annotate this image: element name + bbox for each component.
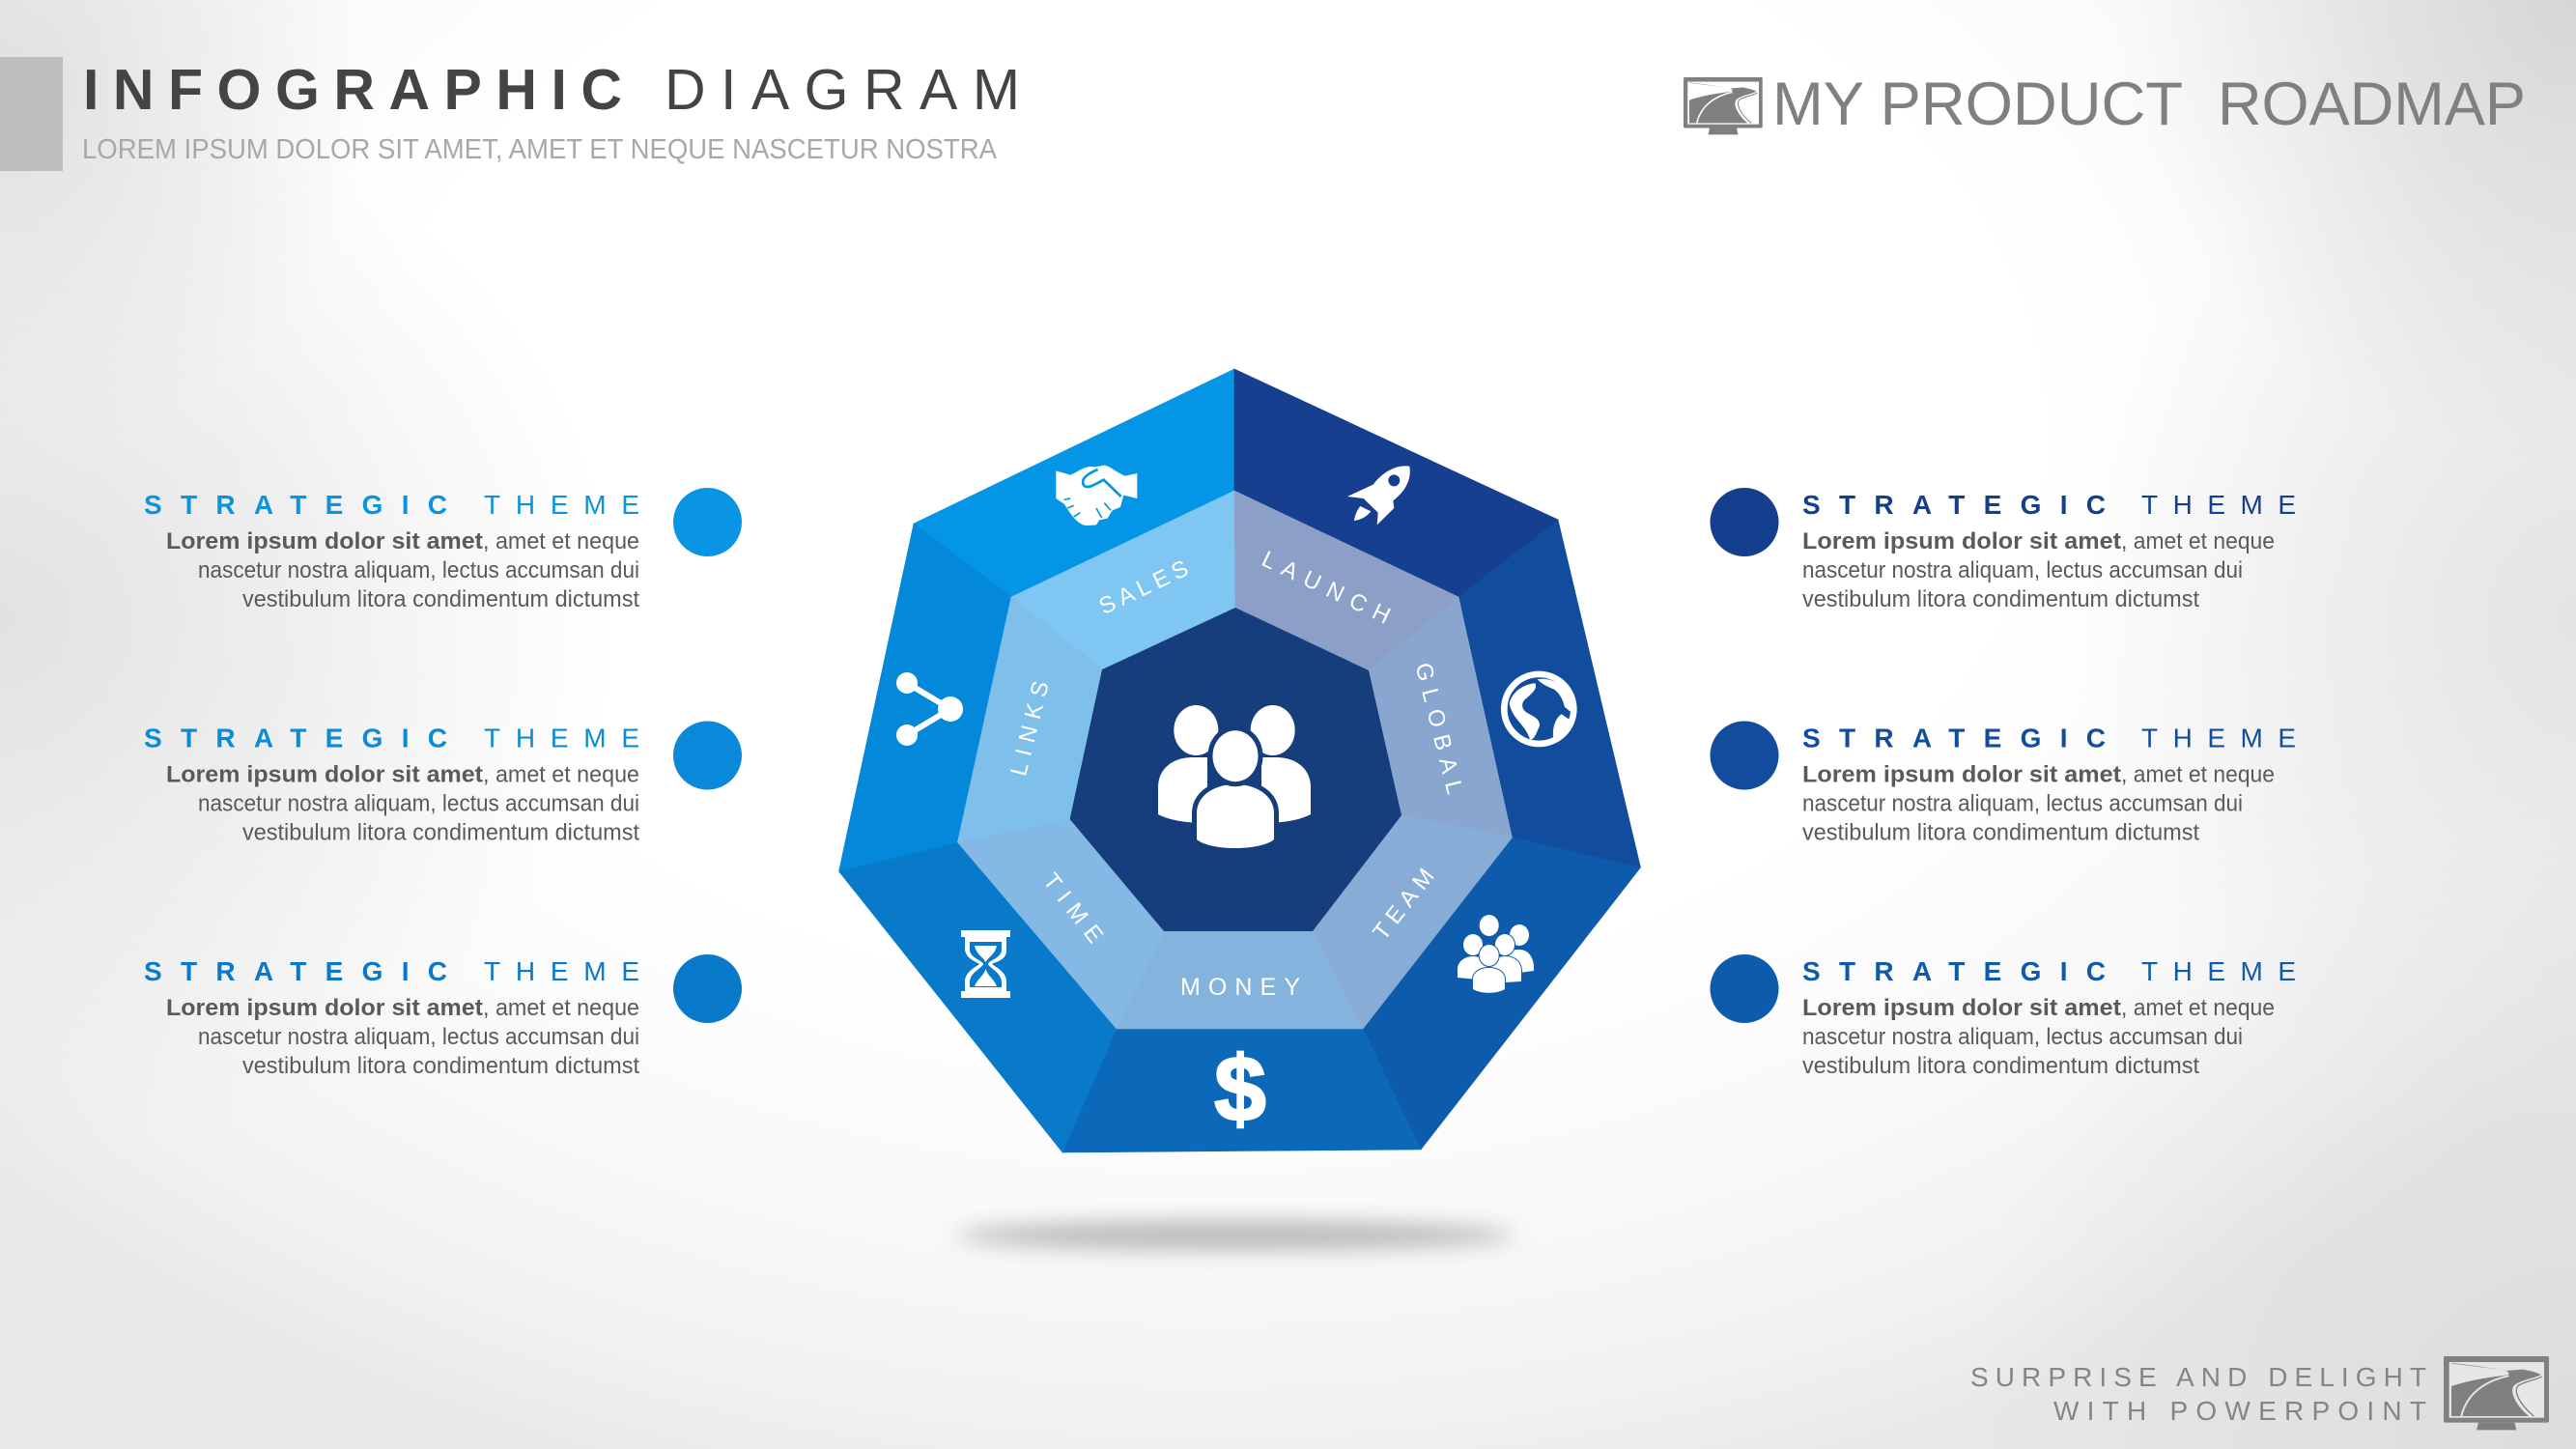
heptagon diagram bbox=[838, 369, 1640, 1152]
heading bbox=[144, 490, 639, 520]
body text: vestibulum litora condimentum dictumst bbox=[242, 819, 639, 846]
label: links: LINKS bbox=[1005, 678, 1055, 779]
heading: THEME bbox=[484, 723, 639, 753]
right theme 1 bbox=[1710, 488, 2296, 612]
label: launch: LAUNCH bbox=[1258, 546, 1395, 630]
heading: THEME bbox=[2141, 490, 2296, 520]
right theme 2 bbox=[1710, 721, 2296, 846]
heading bbox=[144, 723, 639, 753]
body text: nascetur nostra aliquam, lectus accumsan dui bbox=[198, 557, 639, 583]
body text bbox=[166, 995, 639, 1079]
left theme 2 bbox=[144, 721, 742, 846]
marker dot bbox=[1710, 954, 1779, 1023]
segment: money bbox=[1062, 931, 1421, 1152]
heading bbox=[1802, 723, 2296, 753]
header accent block bbox=[0, 57, 63, 171]
center hexagon bbox=[1070, 608, 1401, 931]
body text: vestibulum litora condimentum dictumst bbox=[1802, 586, 2199, 612]
logo: road monitor top bbox=[1684, 77, 1763, 134]
segment: global bbox=[1369, 520, 1640, 867]
body text: nascetur nostra aliquam, lectus accumsan dui bbox=[198, 790, 639, 817]
body text: , amet et neque bbox=[483, 995, 639, 1021]
icon: hourglass bbox=[961, 930, 1010, 998]
body text bbox=[1802, 761, 2275, 846]
heading: THEME bbox=[2141, 723, 2296, 753]
heading: THEME bbox=[484, 490, 639, 520]
body text: vestibulum litora condimentum dictumst bbox=[1802, 819, 2199, 846]
icon: rocket bbox=[1347, 466, 1410, 525]
segment: sales bbox=[914, 369, 1235, 669]
body text bbox=[1802, 528, 2275, 612]
body text: vestibulum litora condimentum dictumst bbox=[242, 586, 639, 612]
drop shadow under heptagon bbox=[957, 1220, 1514, 1251]
logo: road monitor bottom bbox=[2444, 1356, 2549, 1430]
body text: Lorem ipsum dolor sit amet bbox=[1802, 528, 2121, 554]
footer tagline bbox=[1970, 1362, 2426, 1426]
marker dot bbox=[673, 721, 742, 790]
icon: globe bbox=[1504, 674, 1573, 744]
body text: , amet et neque bbox=[2121, 995, 2275, 1021]
segment: team bbox=[1313, 815, 1640, 1150]
body text: vestibulum litora condimentum dictumst bbox=[242, 1053, 639, 1079]
heading: STRATEGIC bbox=[144, 956, 447, 986]
brand heading: MY PRODUCT bbox=[1772, 71, 2183, 138]
body text: , amet et neque bbox=[483, 528, 639, 554]
body text: , amet et neque bbox=[2121, 761, 2275, 788]
segment: launch bbox=[1234, 369, 1558, 670]
heading: STRATEGIC bbox=[1802, 723, 2106, 753]
body text bbox=[166, 528, 639, 612]
left theme 1 bbox=[144, 488, 742, 612]
body text: nascetur nostra aliquam, lectus accumsan dui bbox=[1802, 1024, 2243, 1050]
brand heading: ROADMAP bbox=[2218, 71, 2526, 138]
heading bbox=[1802, 490, 2296, 520]
heading: STRATEGIC bbox=[1802, 490, 2106, 520]
heading: STRATEGIC bbox=[144, 490, 447, 520]
label: time: TIME bbox=[1037, 868, 1108, 949]
body text: nascetur nostra aliquam, lectus accumsan dui bbox=[1802, 790, 2243, 817]
footer tagline: WITH POWERPOINT bbox=[2053, 1396, 2426, 1426]
marker dot bbox=[1710, 721, 1779, 790]
brand heading bbox=[1772, 71, 2526, 138]
marker dot bbox=[1710, 488, 1779, 556]
heading: THEME bbox=[2141, 956, 2296, 986]
label: sales: SALES bbox=[1095, 555, 1193, 620]
label: team: TEAM bbox=[1368, 864, 1440, 946]
segment: links bbox=[838, 524, 1102, 871]
segment: time bbox=[838, 819, 1164, 1152]
heading: STRATEGIC bbox=[1802, 956, 2106, 986]
body text bbox=[166, 761, 639, 846]
title: INFOGRAPHIC bbox=[83, 58, 622, 122]
body text: nascetur nostra aliquam, lectus accumsan dui bbox=[198, 1024, 639, 1050]
body text: nascetur nostra aliquam, lectus accumsan dui bbox=[1802, 557, 2243, 583]
footer tagline: SURPRISE AND DELIGHT bbox=[1970, 1362, 2426, 1392]
marker dot bbox=[673, 954, 742, 1023]
heading bbox=[1802, 956, 2296, 986]
body text: , amet et neque bbox=[2121, 528, 2275, 554]
body text: Lorem ipsum dolor sit amet bbox=[1802, 761, 2121, 788]
body text: Lorem ipsum dolor sit amet bbox=[166, 528, 483, 554]
title bbox=[83, 58, 1020, 122]
marker dot bbox=[673, 488, 742, 556]
label: global: GLOBAL bbox=[1410, 660, 1467, 797]
icon: people group bbox=[1458, 915, 1534, 993]
heading: THEME bbox=[484, 956, 639, 986]
body text: Lorem ipsum dolor sit amet bbox=[166, 995, 483, 1021]
right theme 3 bbox=[1710, 954, 2296, 1079]
icon: dollar: $ bbox=[1214, 1037, 1266, 1141]
heading bbox=[144, 956, 639, 986]
body text: Lorem ipsum dolor sit amet bbox=[1802, 995, 2121, 1021]
label: money: MONEY bbox=[1180, 974, 1300, 1001]
body text: , amet et neque bbox=[483, 761, 639, 788]
title: DIAGRAM bbox=[665, 58, 1020, 122]
subtitle: LOREM IPSUM DOLOR SIT AMET, AMET ET NEQUE NASCETUR NOSTRA bbox=[82, 134, 998, 165]
icon: share nodes bbox=[896, 672, 963, 746]
body text: vestibulum litora condimentum dictumst bbox=[1802, 1053, 2199, 1079]
icon: central people bbox=[1158, 705, 1311, 848]
body text bbox=[1802, 995, 2275, 1079]
body text: Lorem ipsum dolor sit amet bbox=[166, 761, 483, 788]
icon: handshake bbox=[1056, 466, 1137, 526]
heading: STRATEGIC bbox=[144, 723, 447, 753]
left theme 3 bbox=[144, 954, 742, 1079]
